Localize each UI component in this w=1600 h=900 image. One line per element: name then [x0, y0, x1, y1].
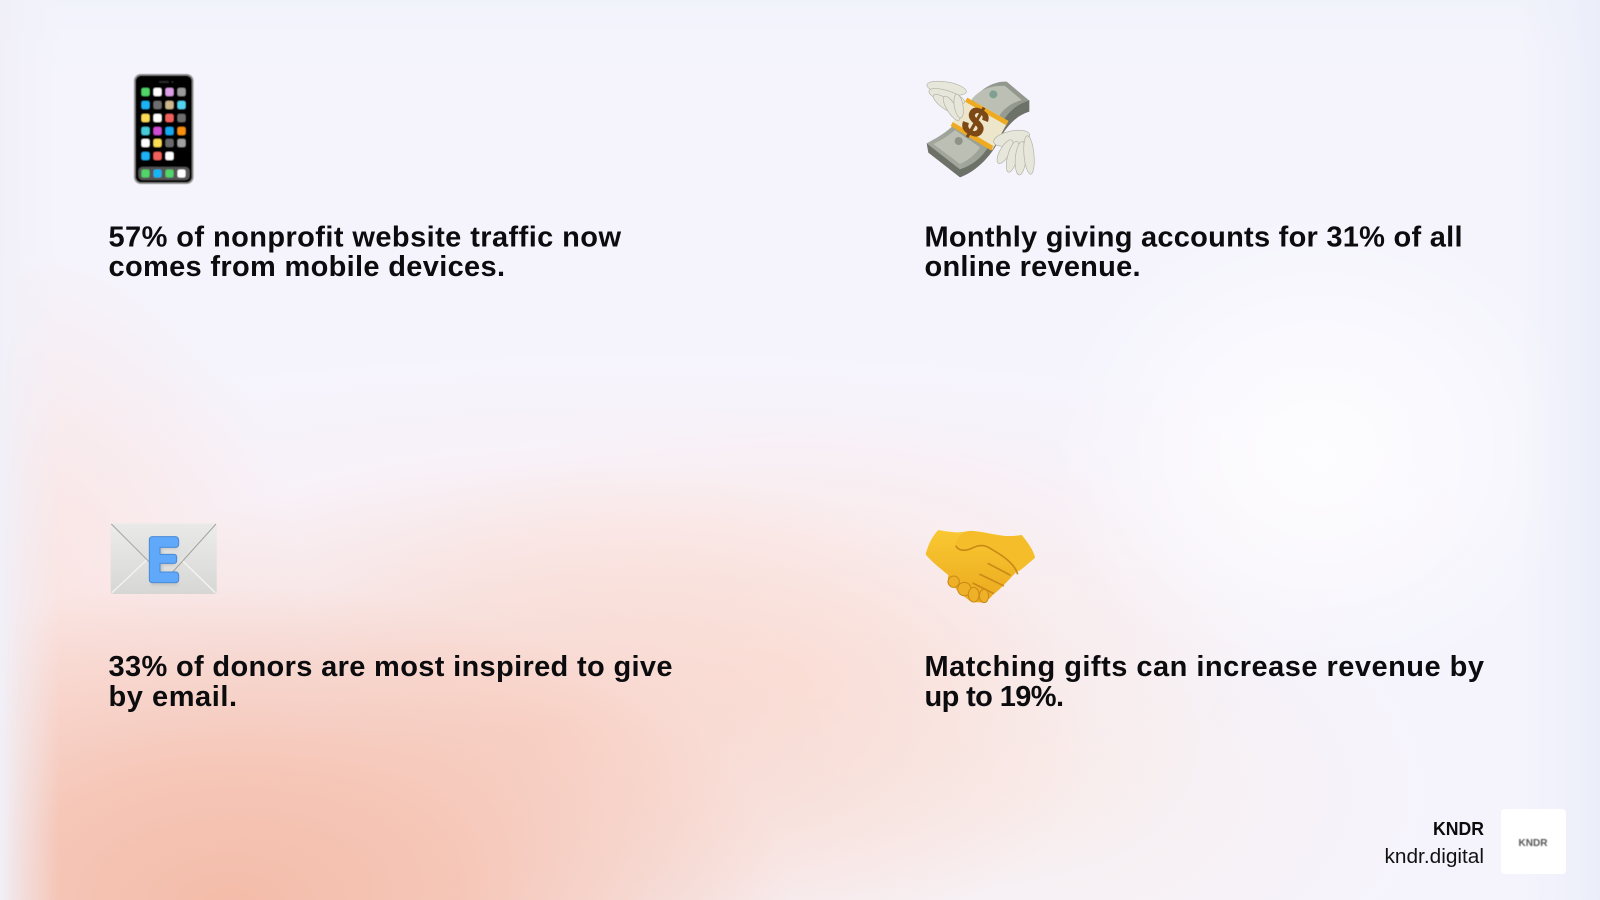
text: monthly giving stat: online revenue.	[924, 251, 1140, 283]
text: email stat: by email.	[108, 681, 237, 713]
icon: money with wings: $	[954, 97, 997, 148]
brand name: KNDR	[1433, 818, 1484, 839]
logo box: KNDR	[1519, 838, 1548, 849]
text: mobile stat: 57% of nonprofit website traffic now	[108, 222, 621, 254]
text: matching gifts stat: up to 19%.	[924, 681, 1064, 713]
panel: matching gifts	[924, 530, 1484, 713]
brand footer	[1384, 809, 1566, 874]
icon: smartphone	[134, 74, 194, 184]
icon: envelope with E	[111, 523, 217, 594]
panel: monthly giving	[924, 79, 1462, 283]
text: matching gifts stat	[924, 651, 1484, 713]
text: matching gifts stat: Matching gifts can increase revenue by	[924, 651, 1484, 683]
brand url: kndr.digital	[1384, 846, 1484, 868]
text: monthly giving stat	[924, 222, 1462, 283]
icon: money with wings	[926, 79, 1036, 177]
text: mobile stat	[108, 222, 621, 283]
text: email stat	[108, 651, 672, 713]
text: email stat: 33% of donors are most inspired to give	[108, 651, 672, 683]
text: monthly giving stat: Monthly giving accounts for 31% of all	[924, 222, 1462, 254]
icon: handshake	[926, 530, 1035, 603]
panel: mobile traffic	[108, 74, 621, 283]
panel: email	[108, 523, 672, 713]
text: mobile stat: comes from mobile devices.	[108, 251, 505, 283]
logo box	[1501, 809, 1566, 874]
